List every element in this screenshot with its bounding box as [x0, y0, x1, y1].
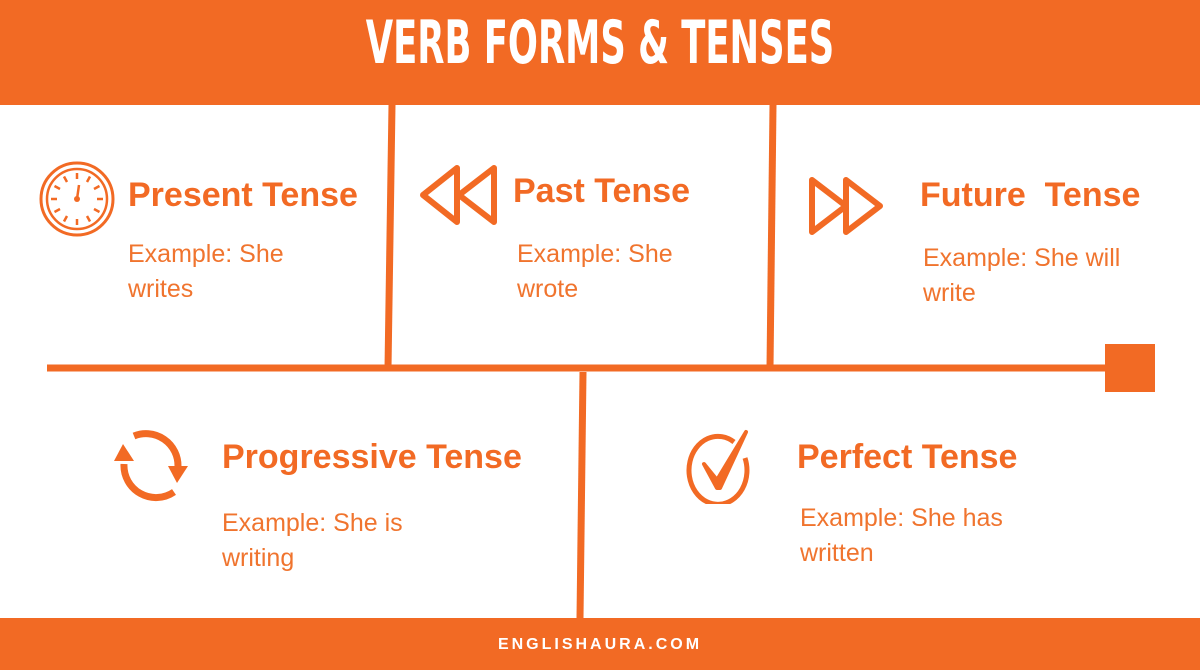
heading: past: Past Tense	[513, 172, 690, 210]
text: perfect example	[800, 504, 1003, 567]
text: future example: write	[923, 279, 976, 307]
text: present example: Example: She	[128, 240, 284, 268]
heading: future: Future Tense	[920, 176, 1140, 214]
text: progressive example: Example: She is	[222, 509, 403, 537]
icon: rewind	[420, 165, 497, 225]
text: perfect example: Example: She has	[800, 504, 1003, 532]
icon: fast forward	[809, 177, 883, 235]
footer text: ENGLISHAURA.COM	[498, 636, 702, 653]
heading: perfect: Perfect Tense	[797, 438, 1017, 476]
text: future example	[923, 244, 1120, 307]
header banner	[0, 0, 1200, 105]
heading: progressive: Progressive Tense	[222, 438, 522, 476]
text: past example: wrote	[517, 275, 578, 303]
text: present example	[128, 240, 284, 303]
text: perfect example: written	[800, 539, 874, 567]
text: progressive example	[222, 509, 403, 572]
icon: check	[686, 430, 750, 504]
title: VERB FORMS & TENSES	[366, 8, 834, 78]
footer banner	[0, 618, 1200, 670]
text: progressive example: writing	[222, 544, 294, 572]
text: past example	[517, 240, 673, 303]
text: future example: Example: She will	[923, 244, 1120, 272]
text: present example: writes	[128, 275, 193, 303]
icon: cycle arrows	[114, 430, 188, 502]
text: past example: Example: She	[517, 240, 673, 268]
icon: clock	[40, 162, 114, 236]
heading: present: Present Tense	[128, 176, 358, 214]
